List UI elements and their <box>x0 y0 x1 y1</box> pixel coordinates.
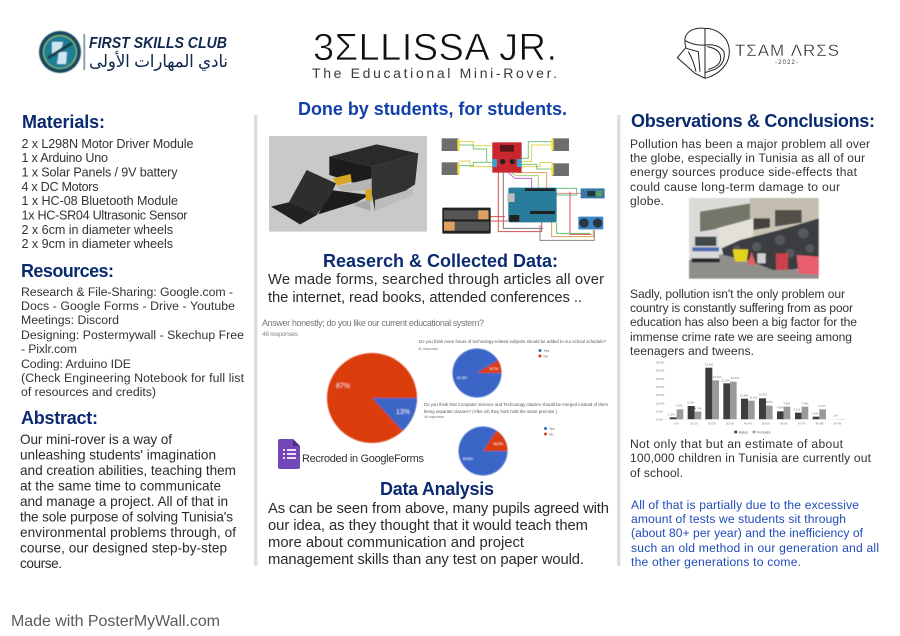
text: resources: Research & File-Sharing: Google.com - <box>21 285 233 299</box>
heading: Data Analysis: Data Analysis <box>380 479 494 499</box>
list: materials: 1 x HC-08 Bluetooth Module <box>22 194 178 208</box>
bar chart: out-of-school children: 25,0% <box>656 377 665 381</box>
bar chart: out-of-school children: 6,2% <box>676 404 683 408</box>
bar chart: out-of-school children: 80-89 <box>816 422 824 426</box>
list: materials: 4 x DC Motors <box>22 180 98 194</box>
text: crime and education <box>630 287 857 358</box>
bar chart: out-of-school children: 31,8% <box>705 362 713 366</box>
logo: Team Ares: -2022- <box>775 60 798 66</box>
pie chart: technology hours: 8.7% <box>490 367 498 371</box>
text: children out of school <box>630 437 872 480</box>
logo: Team Ares: TΣAM ΛRΣS <box>735 41 839 60</box>
charts: Google Forms survey results: Do you think more hours of technology-related subjects should be added to our school schedule? <box>419 339 607 344</box>
bar chart: out-of-school children: 15,0% <box>656 393 665 397</box>
charts: Google Forms survey results: Do you think that Computer Science and Technology classes should be merged instead of them <box>424 402 608 407</box>
heading: Abstract: Abstract: <box>21 408 98 428</box>
text: pollution <box>630 137 870 208</box>
legend: pie 2: Yes <box>549 427 555 431</box>
heading: Done by students: Done by students, for students. <box>298 99 567 119</box>
bar chart: out-of-school children: 10,0% <box>656 401 665 405</box>
bar chart: out-of-school children: 1,6% <box>811 411 818 415</box>
text: abstract <box>20 432 236 571</box>
text: resources: Designing: Postermywall - Skechup Free <box>21 328 244 342</box>
bar chart: out-of-school children: 4,7% <box>695 406 702 410</box>
heading: Observations and Conclusions: Observations & Conclusions: <box>631 111 875 131</box>
charts: Google Forms survey results: 41 responses <box>418 347 438 351</box>
text: resources: - Pixlr.com <box>21 342 77 356</box>
bar chart: out-of-school children: 4,1% <box>793 407 800 411</box>
text: abstract: environmental problems through, of <box>20 525 236 540</box>
list: materials <box>22 137 194 251</box>
bar chart: out-of-school children: 10-19 <box>690 422 698 426</box>
text: resources: (Check Engineering Notebook for full list <box>21 371 245 385</box>
pie chart: big: 87% <box>336 383 350 390</box>
text: abstract: and manage a project. All of that in <box>20 494 228 509</box>
bar chart: out-of-school children: 8,3% <box>687 401 694 405</box>
list: materials: 2 x 9cm in diameter wheels <box>22 237 173 251</box>
bar chart: out-of-school children: 0-9 <box>674 422 679 426</box>
text: resources: Docs - Google Forms - Drive - Youtube <box>21 299 235 313</box>
charts: Google Forms survey results: being separate classes? (After all, they both hold the same premise.) <box>424 409 558 414</box>
text: abstract: course. <box>20 556 62 571</box>
logo: Team Ares <box>677 28 839 78</box>
bar chart: out-of-school children: 23,2% <box>731 376 739 380</box>
pie chart: big <box>327 353 417 443</box>
logo: First Skills Club: FIRST SKILLS CLUB <box>89 35 227 52</box>
bar chart: out-of-school children: 1,2% <box>668 413 675 417</box>
text: children out of school: of school. <box>630 466 683 480</box>
pie chart: technology hours <box>452 348 502 398</box>
text: data analysis: more about communication and project <box>268 535 524 551</box>
bar chart: out-of-school children: 24,0% <box>713 375 721 379</box>
bar chart: out-of-school children: 60-69 <box>780 422 788 426</box>
bar chart: out-of-school children: 20,0% <box>656 385 665 389</box>
logo: First Skills Club: نادي المهارات الأولى <box>89 51 228 72</box>
bar chart: out-of-school children: 50-59 <box>762 422 770 426</box>
text: crime and education: immense crime rate we are seeing among <box>630 330 852 344</box>
bar chart: out-of-school children <box>656 361 847 434</box>
list: materials: 1 x Arduino Uno <box>22 151 108 165</box>
list: materials: 2 x 6cm in diameter wheels <box>22 223 173 237</box>
image: waste pile photo <box>689 198 819 279</box>
pie chart: merged classes: 84.8% <box>463 457 473 461</box>
legend: pie 2 <box>544 427 555 436</box>
text: pollution: globe. <box>630 194 664 208</box>
text: pollution: could cause long-term damage to our <box>630 180 840 194</box>
bar chart: out-of-school children: 70-79 <box>798 422 806 426</box>
text: conclusion in blue: amount of tests we students sit through <box>631 512 846 526</box>
text: pollution: Pollution has been a major problem all over <box>630 137 870 151</box>
bar chart: out-of-school children: 0,0% <box>656 417 663 421</box>
title: Bellissa Jr.: 3ΣLLISSA JR. <box>313 27 557 69</box>
subtitle: The Educational Mini-Rover. <box>312 65 557 81</box>
list: materials: 1 x Solar Panels / 9V battery <box>22 166 178 180</box>
bar chart: out-of-school children: Males <box>738 430 748 434</box>
bar chart: out-of-school children: 90-99 <box>834 422 842 426</box>
text: children out of school: 100,000 children in Tunisia are currently out <box>630 451 872 465</box>
text: resources: Coding: Arduino IDE <box>21 357 131 371</box>
text: crime and education: teenagers and tweens. <box>630 344 754 358</box>
charts: Google Forms survey results <box>262 318 608 476</box>
heading: Materials: Materials: <box>22 112 105 132</box>
image: wiring diagram <box>442 138 605 240</box>
heading: Resources: Resources: <box>21 261 114 281</box>
bar chart: out-of-school children: 11,6% <box>749 395 758 399</box>
text: pollution: energy sources produce side-effects that <box>630 165 858 179</box>
legend: pie 2: No <box>549 432 554 436</box>
text: conclusion in blue: the other generations to come. <box>631 555 801 569</box>
bar chart: out-of-school children: ,2% <box>833 414 838 418</box>
legend: pie 1: No <box>544 354 548 358</box>
text: abstract: course, our designed step-by-step <box>20 540 227 556</box>
text: abstract: the sole purpose of solving Tunisia's <box>20 510 233 524</box>
bar chart: out-of-school children: 8,5% <box>766 400 773 404</box>
text: crime and education: Sadly, pollution isn't the only problem our <box>630 287 845 301</box>
bar chart: out-of-school children: 30-39 <box>726 422 734 426</box>
bar chart: out-of-school children: Females <box>757 430 771 434</box>
list: materials: 1x HC-SR04 Ultrasonic Sensor <box>22 208 188 222</box>
bar chart: out-of-school children: 6,2% <box>819 404 826 408</box>
bar chart: out-of-school children: 35,0% <box>656 361 665 365</box>
pie chart: big: 13% <box>396 409 410 416</box>
bar chart: out-of-school children: 13,0% <box>758 393 767 397</box>
list: materials: 2 x L298N Motor Driver Module <box>22 137 194 151</box>
charts: Google Forms survey results: Answer honestly; do you like our current educational system? <box>262 318 484 328</box>
bar chart: out-of-school children: 40-49 <box>744 422 752 426</box>
pie chart: merged classes: 15.2% <box>493 442 503 446</box>
icon: Google Forms <box>278 439 300 469</box>
text: abstract: and creation abilities, teaching them <box>20 463 236 478</box>
legend: pie 1 <box>538 349 549 358</box>
legend: pie 1: Yes <box>544 349 549 353</box>
bar chart: out-of-school children: 4,9% <box>777 406 784 410</box>
text: children out of school: Not only that but an estimate of about <box>630 437 844 451</box>
text: conclusion in blue: All of that is partially due to the excessive <box>631 498 859 512</box>
text: data analysis: management skills than any test on paper would. <box>268 552 584 568</box>
text: abstract: unleashing students' imagination <box>20 448 216 462</box>
text: resources: of resources and credits) <box>21 385 156 399</box>
text: research: the internet, read books, attended conferences .. <box>268 290 582 306</box>
bar chart: out-of-school children: 5,0% <box>656 409 663 413</box>
image: rover 3D model <box>269 136 427 232</box>
bar chart: out-of-school children: 20-29 <box>708 422 716 426</box>
text: data analysis: our idea, as they thought that it would teach them <box>268 518 588 534</box>
bar chart: out-of-school children: 30,0% <box>656 369 665 373</box>
watermark: Made with PosterMyWall: Made with PosterMyWall.com <box>11 613 220 630</box>
text: data analysis <box>268 501 609 568</box>
charts: Google Forms survey results: 46 responses <box>424 415 444 419</box>
heading: Research and collected data: Reaserch & Collected Data: <box>323 251 558 271</box>
text: crime and education: country is constantly suffering from as poor <box>630 301 853 315</box>
text: conclusion in blue: (about 80+ per year) and the inefficiency of <box>631 526 864 540</box>
text: conclusion in blue <box>631 498 879 569</box>
text: crime and education: education has also been a big factor for the <box>630 315 857 329</box>
logo: First Skills Club <box>39 31 228 73</box>
pie chart: technology hours: 91.3% <box>457 376 467 380</box>
text: abstract: at the same time to communicate <box>20 478 221 494</box>
pie chart: merged classes <box>458 426 508 476</box>
bar chart: out-of-school children: 22,2% <box>721 379 730 383</box>
text: research: We made forms, searched through articles all over <box>268 272 604 288</box>
text: resources: Meetings: Discord <box>21 313 119 327</box>
bar chart: out-of-school children: 12,8% <box>740 393 749 397</box>
text: conclusion in blue: such an old method in our generation and all <box>631 541 879 555</box>
text: data analysis: As can be seen from above, many pupils agreed with <box>268 501 609 517</box>
caption: recorded in Google Forms: Recroded in GoogleForms <box>302 453 424 465</box>
text: abstract: Our mini-rover is a way of <box>20 432 172 447</box>
text: pollution: the globe, especially in Tunisia as all of our <box>630 151 865 165</box>
charts: Google Forms survey results: 46 responses <box>262 331 299 338</box>
bar chart: out-of-school children: 7,8% <box>802 401 809 405</box>
text: resources <box>21 285 245 399</box>
text: research <box>268 272 604 306</box>
bar chart: out-of-school children: 7,8% <box>783 401 790 405</box>
